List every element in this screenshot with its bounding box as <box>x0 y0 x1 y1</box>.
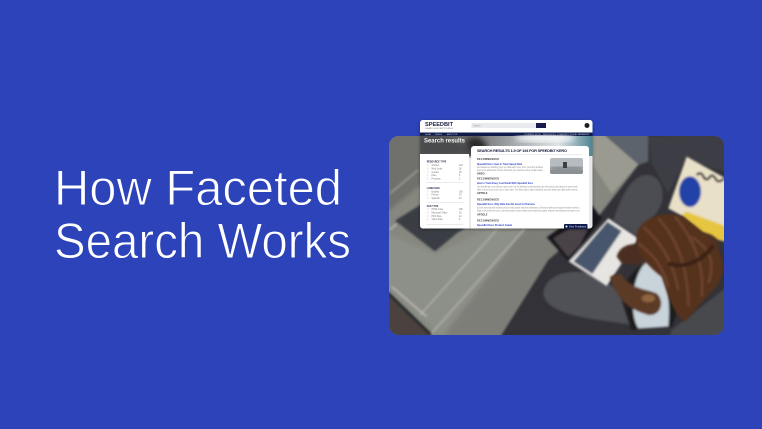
result 2 <box>477 178 578 195</box>
facet: resource type: 38 <box>459 168 462 170</box>
result 1 <box>477 158 543 176</box>
feedback button: Give Feedback <box>569 226 587 228</box>
result 3: If you've found yourself wondering why so many people track their performance, this article walks you through the reasons behind it. <box>477 206 580 209</box>
navigation bar <box>420 132 592 136</box>
result 2: RECOMMENDED <box>477 178 499 180</box>
facet: file type: Microsoft Office <box>432 212 448 214</box>
navigation bar: COMMUNITY <box>557 134 570 136</box>
result 2: ARTICLE <box>477 192 488 195</box>
hero banner <box>420 134 592 156</box>
feedback button <box>564 224 588 229</box>
facet: language: Spanish <box>432 198 441 200</box>
sofa <box>498 133 732 340</box>
header bar <box>420 120 592 132</box>
result 1: and on to advanced metrics that help you improve every single week. <box>477 169 543 172</box>
facet: resource type: Articles <box>432 164 440 167</box>
result 4: Speedbit Kero Product Guide <box>477 224 513 227</box>
result 2: Here is how to get more out of your stats. Try these tips to stay motivated, and see what your data really means. <box>477 189 578 192</box>
user avatar <box>584 123 590 128</box>
result 2: Your Speedbit app is more than just a step counter. Use the dashboard to understand how your metrics add up and change from week to week. <box>477 185 578 188</box>
hero heading: Search results <box>424 138 465 144</box>
torso and arm <box>610 233 719 330</box>
facet: resource type: Products <box>432 178 441 180</box>
results heading: SEARCH RESULTS 1-9 OF 194 FOR SPEEDBIT KERO <box>477 148 567 153</box>
results panel <box>471 146 589 228</box>
result 1 thumbnail <box>550 158 583 174</box>
logo: SPEEDBIT <box>425 122 453 128</box>
result 3: ARTICLE <box>477 214 488 216</box>
facet: file type: 12 <box>459 216 462 218</box>
result 2: How to Track Every Last Detail With Speedbit Kero <box>477 182 534 185</box>
result 4 <box>477 219 513 227</box>
navigation bar: HOME <box>425 134 432 136</box>
facet: file type: 150 <box>459 209 464 211</box>
rug and floor <box>385 130 732 343</box>
facet: language <box>426 187 464 202</box>
navigation bar: ABOUT US <box>447 133 458 136</box>
navigation bar: RESOURCES <box>543 134 556 136</box>
facet: file type: Video Files <box>432 219 444 221</box>
facet: file type <box>426 206 464 224</box>
cushion <box>668 157 732 243</box>
facet: file type: FILE TYPE <box>427 206 439 208</box>
result 3: Data is not just for the pros. It can help anyone stay consistent and reach their goals, whatever the distance you want to run. <box>477 210 580 213</box>
facet: resource type: Guides <box>432 172 440 174</box>
hair <box>637 214 723 322</box>
title <box>54 160 351 269</box>
result 3 <box>477 198 580 216</box>
facet: resource type: 2 <box>459 178 461 180</box>
navigation bar: COURSES <box>524 134 535 136</box>
legs <box>543 175 663 325</box>
facet: language: English <box>432 191 440 193</box>
photo: woman with laptop on sofa <box>385 130 732 343</box>
navigation bar: STORE <box>570 134 578 136</box>
facet: language: 24 <box>459 194 462 196</box>
search box: Search <box>473 124 481 128</box>
search box <box>472 123 546 128</box>
facet sidebar <box>420 154 469 228</box>
facet: language: 160 <box>459 191 464 193</box>
facet: file type: HTML Files <box>432 209 444 211</box>
facet: file type: 6 <box>459 219 461 221</box>
facet: resource type: RESOURCE TYPE <box>427 162 447 164</box>
facet: language: 10 <box>459 198 462 200</box>
navigation bar: MEMBERSHIP <box>578 134 590 136</box>
facet: file type: PDF Files <box>432 216 442 218</box>
result 1: Speedbit Kero: How to Track Speed Data <box>477 163 523 166</box>
facet: resource type: 6 <box>459 175 461 177</box>
result 1: RECOMMENDED <box>477 158 499 161</box>
infographic canvas <box>56 119 724 335</box>
facet: resource type: Web Links <box>432 168 443 170</box>
navigation bar: PRESS <box>435 134 442 136</box>
facet: language: French <box>432 194 439 196</box>
title: Search Works <box>54 213 351 269</box>
facet: language: LANGUAGE <box>427 187 440 190</box>
facet: resource type <box>426 162 464 183</box>
website screenshot <box>420 120 592 229</box>
facet: file type: 26 <box>459 212 462 214</box>
facet: resource type: 123 <box>459 165 464 167</box>
screenshot body <box>420 120 592 228</box>
result 1: Get started on tracking your run data with Kero, from your first workout <box>477 166 543 169</box>
facet: resource type: Files <box>432 175 437 177</box>
result 4: RECOMMENDED <box>477 219 499 222</box>
result 3: RECOMMENDED <box>477 198 499 202</box>
navigation bar: BLOG <box>535 134 541 136</box>
title: How Faceted <box>54 160 342 216</box>
result 1: VIDEO <box>477 173 485 176</box>
logo: SEARCH EVERYTHING <box>425 127 453 130</box>
facet: resource type: 25 <box>459 172 462 174</box>
result 3: Speedbit Kero: Why Data Can Be Good for Runners <box>477 203 536 206</box>
laptop <box>547 205 638 286</box>
